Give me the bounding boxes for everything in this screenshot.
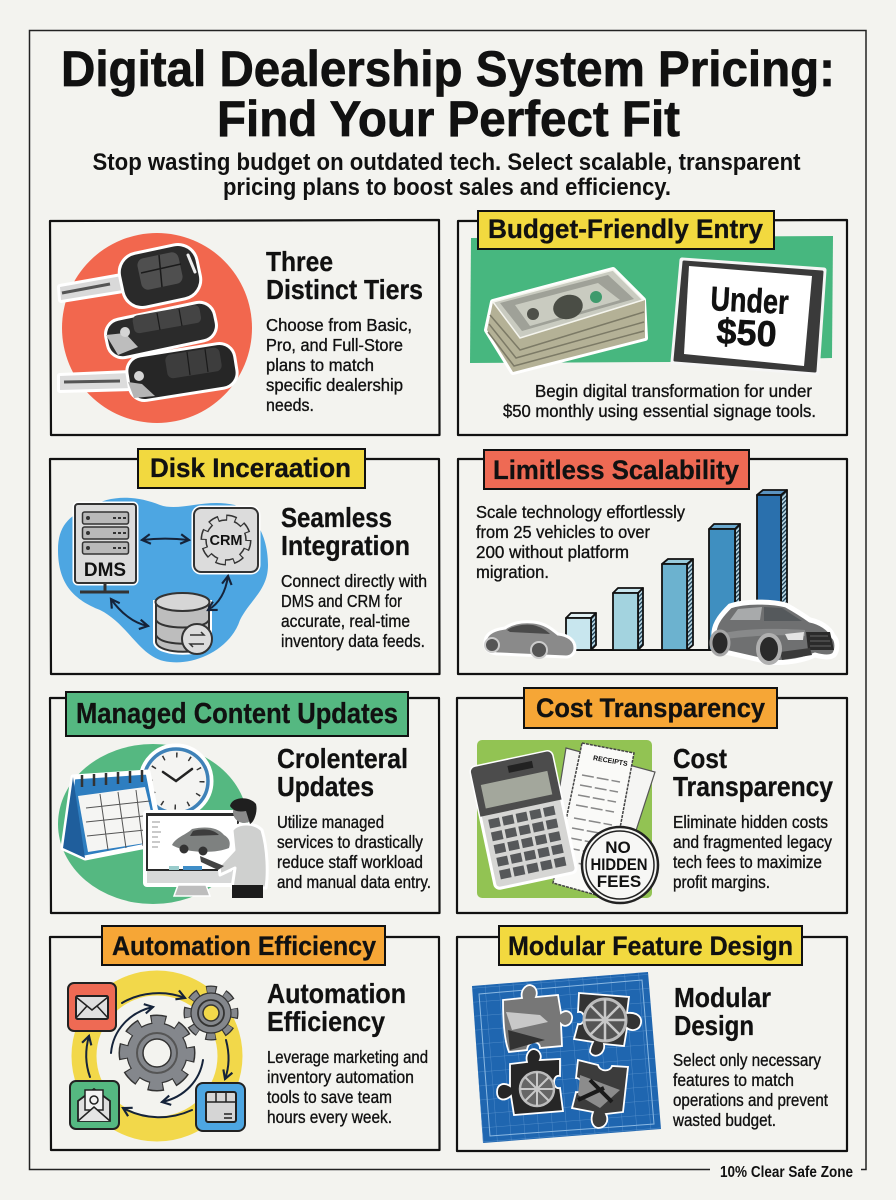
subtitle <box>92 149 801 201</box>
illustration: calculator, receipts, stamp: NO <box>605 838 631 857</box>
panel: automation efficiency <box>50 926 440 1150</box>
section tag: Cost Transparency <box>536 693 765 723</box>
body text: inventory data feeds. <box>281 631 425 651</box>
heading: Automation <box>267 978 406 1009</box>
panel: cost transparency <box>457 688 847 913</box>
body text: Connect directly with <box>281 571 427 591</box>
body text: inventory automation <box>267 1067 414 1087</box>
heading <box>277 743 408 802</box>
body text: tools to save team <box>267 1087 392 1107</box>
illustration: calculator, receipts, stamp: FEES <box>597 872 641 891</box>
body text <box>673 812 832 892</box>
panel: budget-friendly entry <box>458 211 847 435</box>
section tag: Budget-Friendly Entry <box>488 214 763 244</box>
body text: Scale technology effortlessly <box>476 502 685 522</box>
section tag: Automation Efficiency <box>112 931 376 961</box>
heading: Integration <box>281 530 410 561</box>
heading <box>674 982 771 1041</box>
diagram: automation loop with gears <box>68 983 245 1131</box>
subtitle: Stop wasting budget on outdated tech. Select scalable, transparent <box>92 149 801 176</box>
body text: migration. <box>476 562 549 582</box>
body text: from 25 vehicles to over <box>476 522 650 542</box>
body text: and manual data entry. <box>277 872 431 892</box>
heading: Updates <box>277 771 374 802</box>
panel: seamless integration <box>50 449 440 674</box>
section tag: Disk Inceraation <box>150 453 351 483</box>
body text: reduce staff workload <box>277 852 423 872</box>
body text: Eliminate hidden costs <box>673 812 828 832</box>
illustration: cash and tablet: $50 <box>716 310 778 355</box>
illustration: puzzle on blueprint <box>472 972 661 1143</box>
panel: modular feature design <box>457 926 847 1151</box>
heading: Cost <box>673 743 727 774</box>
heading: Modular <box>674 982 771 1013</box>
section tag: Managed Content Updates <box>76 698 398 730</box>
title: Find Your Perfect Fit <box>217 91 680 147</box>
title: Digital Dealership System Pricing: <box>61 41 835 97</box>
heading: Efficiency <box>267 1006 385 1037</box>
safe zone label: 10% Clear Safe Zone <box>720 1164 853 1181</box>
body text: 200 without platform <box>476 542 629 562</box>
panel: three distinct tiers <box>50 220 440 435</box>
section tag <box>66 692 408 736</box>
body text: DMS and CRM for <box>281 591 402 611</box>
body text: accurate, real-time <box>281 611 410 631</box>
heading: Distinct Tiers <box>266 274 423 305</box>
heading: Crolenteral <box>277 743 408 774</box>
heading: Seamless <box>281 502 392 533</box>
illustration: calculator, receipts, stamp: RECEIPTS <box>592 755 628 768</box>
body text: $50 monthly using essential signage tools. <box>503 401 816 421</box>
body text: services to drastically <box>277 832 423 852</box>
illustration: cash and tablet: Under <box>710 280 790 322</box>
body text: and fragmented legacy <box>673 832 832 852</box>
subtitle: pricing plans to boost sales and efficiency. <box>223 174 671 201</box>
body text: operations and prevent <box>673 1090 828 1110</box>
body text: plans to match <box>266 355 374 375</box>
heading <box>266 246 423 305</box>
body text: Choose from Basic, <box>266 315 412 335</box>
illustration: cash and tablet <box>470 236 833 373</box>
body text: Begin digital transformation for under <box>535 381 812 401</box>
heading: Transparency <box>673 771 833 802</box>
body text <box>267 1047 428 1127</box>
heading <box>267 978 406 1037</box>
body text: profit margins. <box>673 872 770 892</box>
body text <box>281 571 427 651</box>
body text: Utilize managed <box>277 812 384 832</box>
body text: Select only necessary <box>673 1050 821 1070</box>
body text: wasted budget. <box>672 1110 776 1130</box>
body text <box>476 502 685 582</box>
body text <box>672 1050 828 1130</box>
panel: managed content updates <box>50 692 440 913</box>
heading: Three <box>266 246 333 277</box>
panel: limitless scalability <box>458 450 847 674</box>
diagram: DMS CRM database <box>58 498 268 662</box>
heading: Design <box>674 1010 754 1041</box>
heading <box>281 502 410 561</box>
body text <box>277 812 431 892</box>
body text: needs. <box>266 395 314 415</box>
body text: tech fees to maximize <box>673 852 822 872</box>
body text: Pro, and Full-Store <box>266 335 403 355</box>
body text: specific dealership <box>266 375 403 395</box>
body text: hours every week. <box>267 1107 392 1127</box>
illustration: calculator, receipts, stamp: HIDDEN <box>590 855 648 874</box>
bar chart with cars <box>485 490 837 663</box>
body text: Leverage marketing and <box>267 1047 428 1067</box>
heading <box>673 743 833 802</box>
title <box>61 41 835 147</box>
body text: features to match <box>673 1070 794 1090</box>
icon: car key fobs on red circle <box>60 233 252 423</box>
body text <box>503 381 816 421</box>
illustration: calculator, receipts, stamp <box>470 740 658 903</box>
illustration: calendar, clock, monitor, person <box>58 744 267 904</box>
section tag: Limitless Scalability <box>493 455 739 485</box>
section tag: Modular Feature Design <box>508 931 793 961</box>
diagram: DMS CRM database: CRM <box>209 533 243 549</box>
diagram: DMS CRM database: DMS <box>84 560 126 581</box>
body text <box>266 315 412 415</box>
